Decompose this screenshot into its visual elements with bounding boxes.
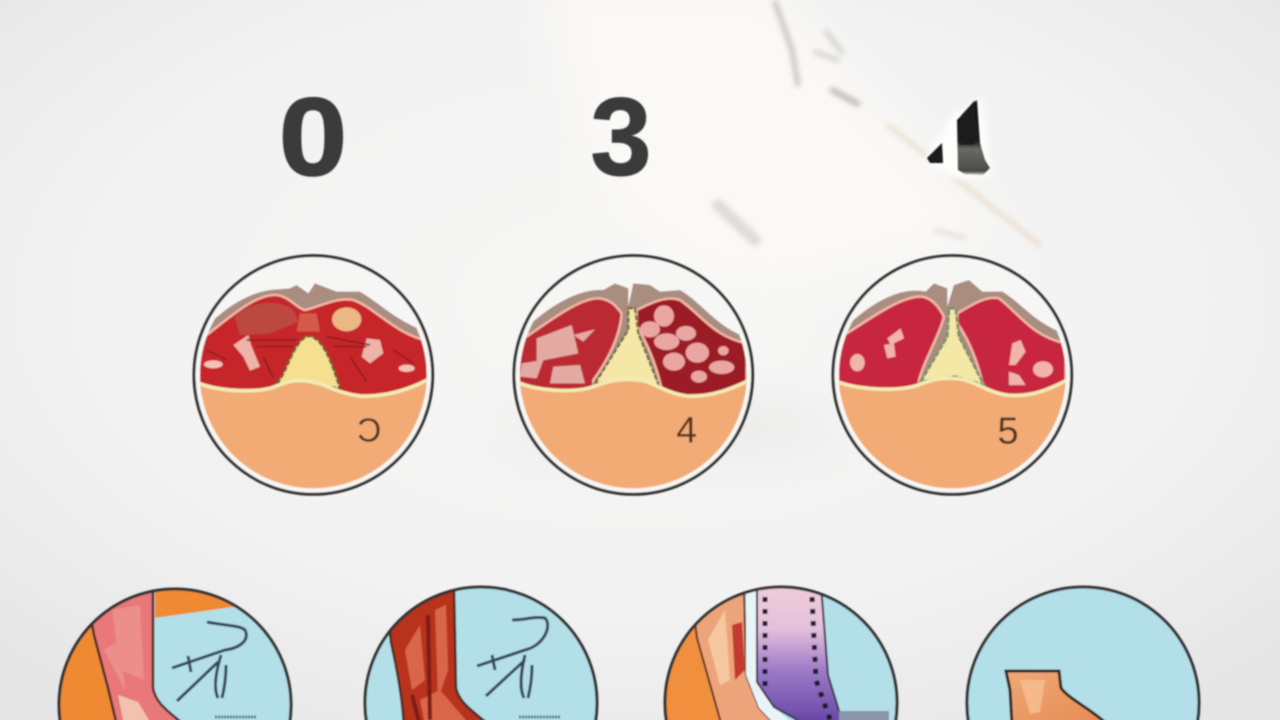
label C: C [357,413,381,450]
panel: lesion circle 2 [513,256,753,497]
left red lobe [836,297,944,397]
orange background [665,627,720,720]
tissue outline [848,280,1061,380]
fine caption [215,716,256,718]
number 4, partly erased: 4 [924,75,986,198]
grey patch [839,711,889,720]
panel: foot circle D [967,587,1199,720]
lesions [850,328,1053,385]
left red lobe [517,298,622,397]
panel: lesion circle 1 [193,256,433,497]
label 5: 5 [997,409,1019,452]
icon: sword figure [477,617,548,698]
fine caption [519,716,560,718]
yellow core [277,336,340,388]
peach base [520,378,747,490]
number 4, partly erased [925,100,990,180]
orange background [59,589,234,720]
tissue outline [527,282,742,382]
skin leg [694,593,772,720]
number 0: 0 [279,75,347,199]
white gap [744,590,790,720]
panel: leg circle B [365,585,597,720]
label 4: 4 [676,409,697,451]
yellow core [921,308,984,385]
lesions [332,307,361,331]
yellow core [595,308,660,388]
icon: foot [1006,671,1108,720]
right dark lobe [637,298,747,397]
peach base [200,378,428,490]
number 3: 3 [590,76,652,199]
red muscle [197,295,430,397]
panel: leg circle C [650,585,897,720]
tissue outline [208,282,421,338]
sock stitches [765,597,832,720]
nodules [640,305,734,383]
compression sock [757,585,845,720]
pink leg [90,591,182,720]
right red lobe [957,298,1066,397]
red leg [388,590,486,720]
peach base [832,377,1072,497]
panel: lesion circle 3 [832,256,1072,497]
panel: leg circle A [50,585,291,720]
icon: sword figure [172,622,246,701]
